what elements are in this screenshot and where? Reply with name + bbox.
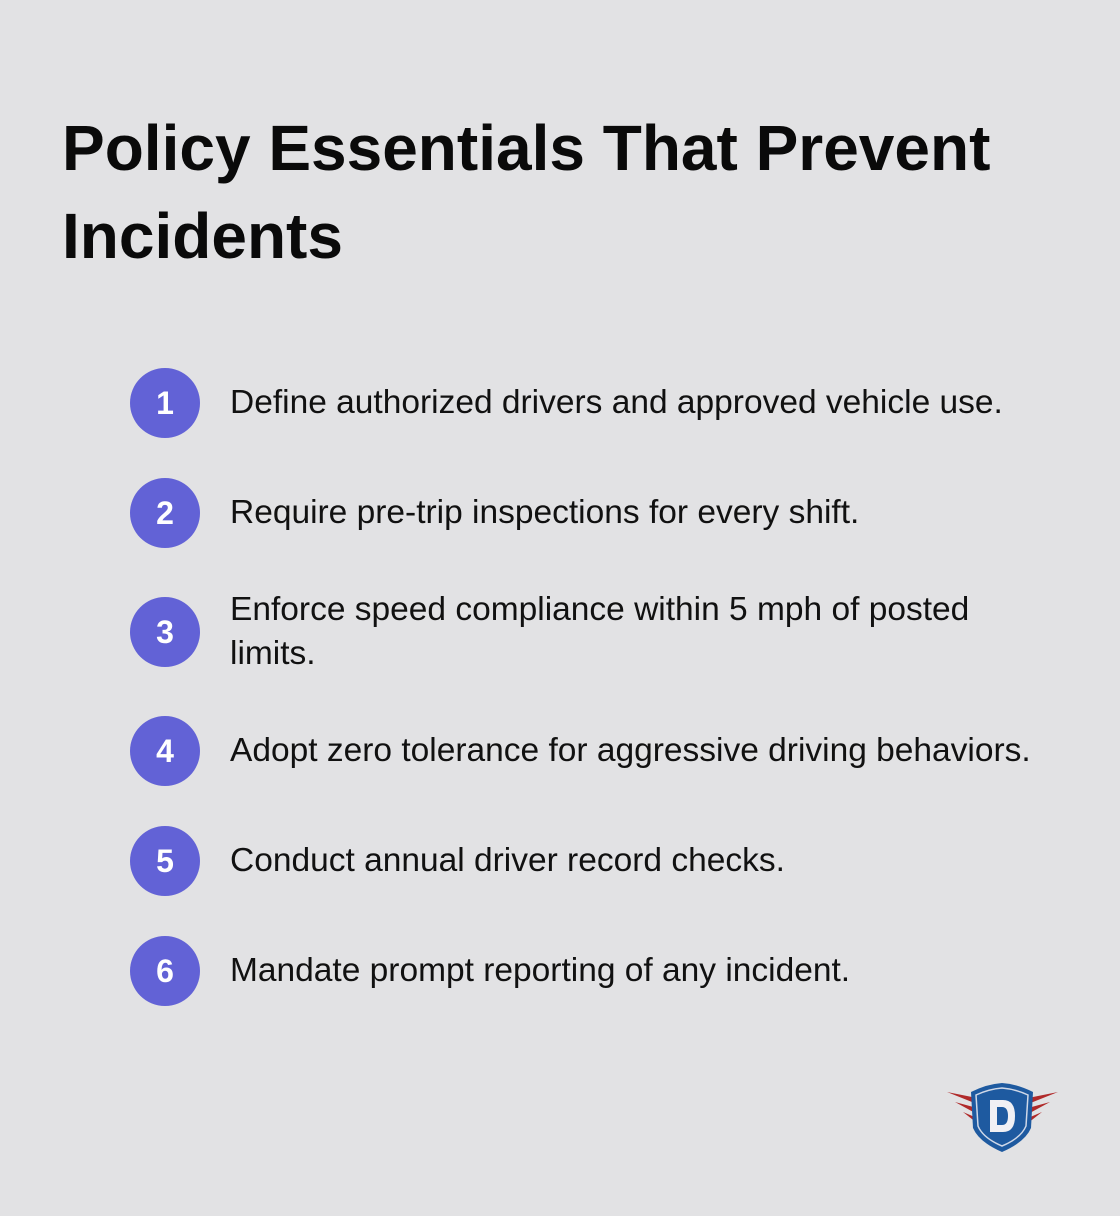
item 1 [130, 368, 1003, 438]
item 6 [130, 936, 850, 1006]
item 6: Mandate prompt reporting of any incident. [230, 952, 850, 989]
item 1: Define authorized drivers and approved vehicle use. [230, 384, 1003, 421]
item 4: Adopt zero tolerance for aggressive driving behaviors. [230, 732, 1031, 769]
title: Incidents [62, 200, 343, 272]
item 2: 2 [156, 495, 174, 531]
item 5: 5 [156, 843, 174, 879]
item 5: Conduct annual driver record checks. [230, 842, 785, 879]
item 4 [130, 716, 1031, 786]
item 4: 4 [156, 733, 174, 769]
title [62, 112, 990, 272]
item 3: limits. [230, 635, 316, 672]
item 3: Enforce speed compliance within 5 mph of posted [230, 591, 969, 628]
item 6: 6 [156, 953, 174, 989]
item 1: 1 [156, 385, 174, 421]
item 5 [130, 826, 785, 896]
title: Policy Essentials That Prevent [62, 112, 990, 184]
item 3: 3 [156, 614, 174, 650]
item 2 [130, 478, 859, 548]
item 3 [130, 591, 969, 672]
item 2: Require pre-trip inspections for every shift. [230, 494, 859, 531]
logo [947, 1083, 1058, 1152]
